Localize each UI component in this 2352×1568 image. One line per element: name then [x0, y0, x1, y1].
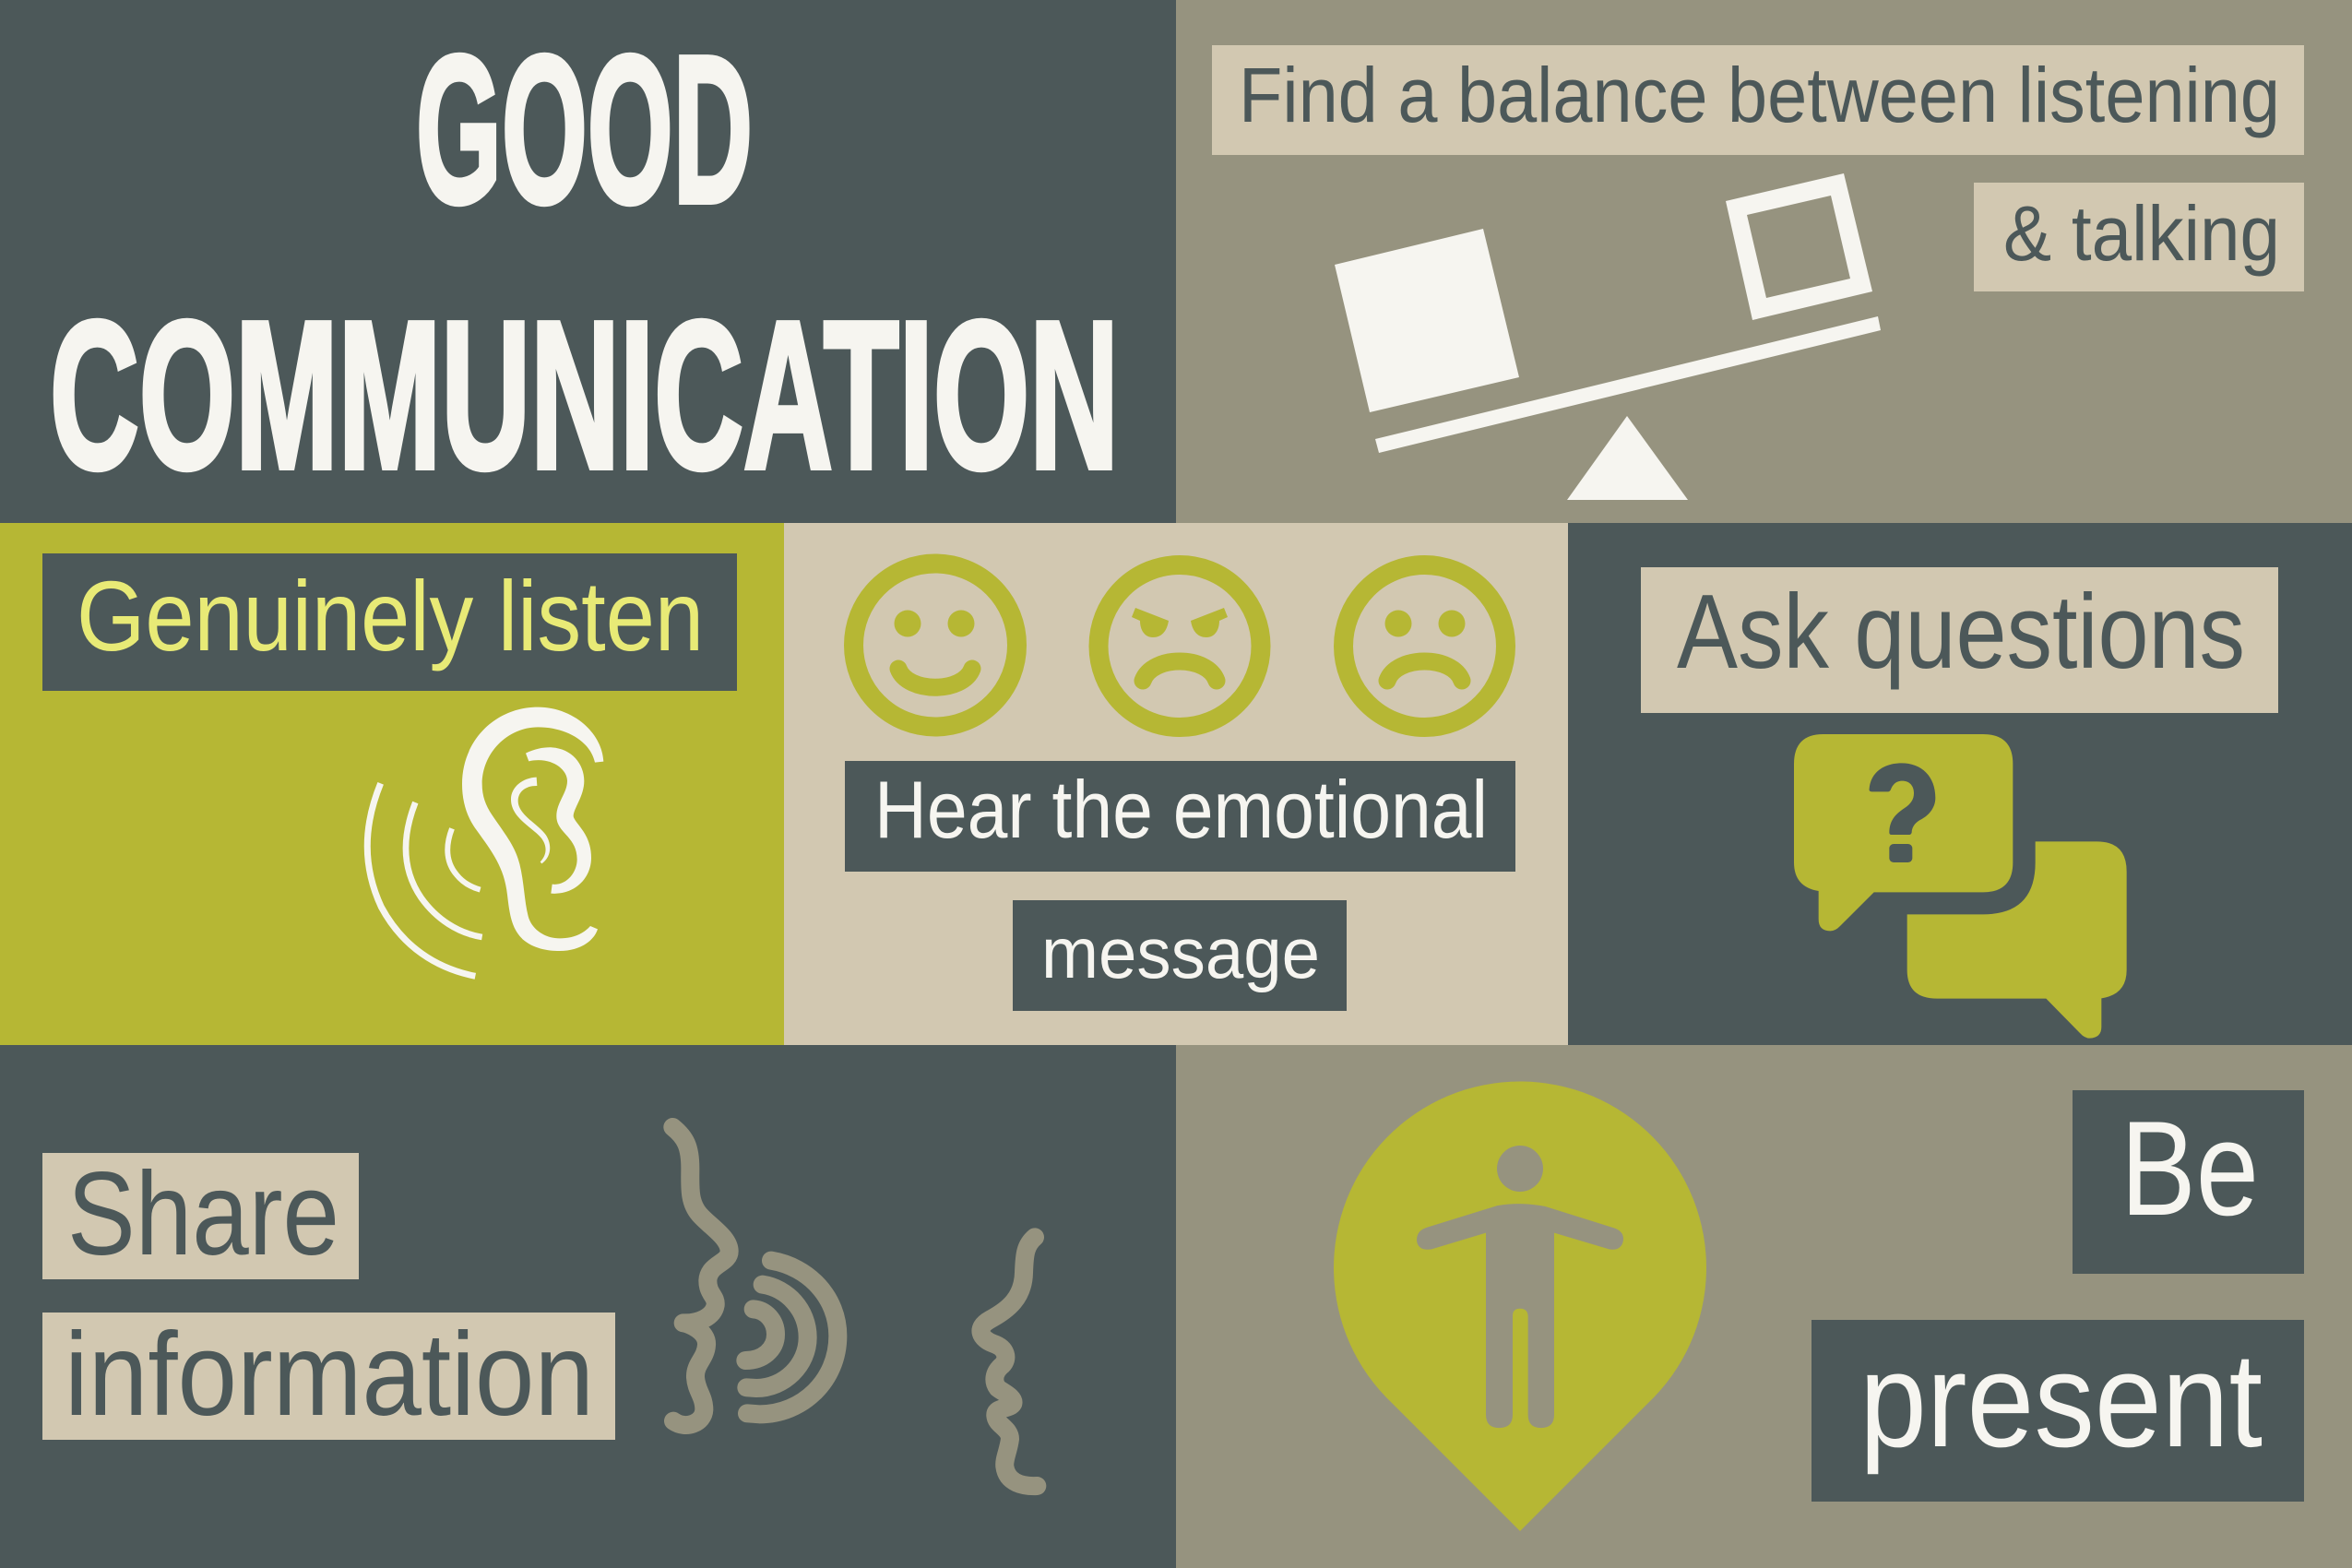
icon: seesaw [1335, 173, 1881, 500]
label: genuinely listen: Genuinely listen [77, 560, 704, 671]
icon: happy face [854, 564, 1016, 727]
panel: balance [1176, 0, 2352, 523]
text block: hear the emotional message [845, 761, 1515, 1011]
icon: sad face [1343, 564, 1505, 727]
text block: find a balance: Find a balance between listening [1239, 52, 2280, 138]
icon: ear with sound waves [367, 707, 603, 976]
icon: speech bubbles [1794, 734, 2127, 1039]
panel: genuinely listen [0, 523, 784, 1045]
text block: be present: present [1859, 1324, 2263, 1475]
panel: emotional message [784, 523, 1568, 1045]
text block: be present [1812, 1090, 2304, 1502]
text block: find a balance [1212, 45, 2304, 291]
text block: find a balance: & talking [2003, 190, 2280, 277]
heading: good communication: COMMUNICATION [50, 279, 1119, 513]
text block: be present: Be [2120, 1093, 2259, 1243]
heading: good communication: GOOD [416, 13, 753, 247]
icon: angry face [1099, 564, 1261, 727]
panel: ask questions [1568, 523, 2352, 1045]
panel: title [0, 0, 1176, 523]
panel: be present [1176, 1045, 2352, 1568]
text block: share information: information [65, 1309, 594, 1441]
label: ask questions: Ask questions [1677, 574, 2245, 691]
icon: person in location pin [1334, 1081, 1706, 1531]
text block: share information [42, 1148, 615, 1441]
text block: hear the emotional message: message [1041, 912, 1320, 993]
panel: share information [0, 1045, 1176, 1568]
icon: speaking faces [672, 1127, 1037, 1486]
heading: good communication [50, 13, 1119, 513]
text block: hear the emotional message: Hear the emotional [874, 764, 1488, 855]
text block: share information: Share [67, 1148, 339, 1280]
